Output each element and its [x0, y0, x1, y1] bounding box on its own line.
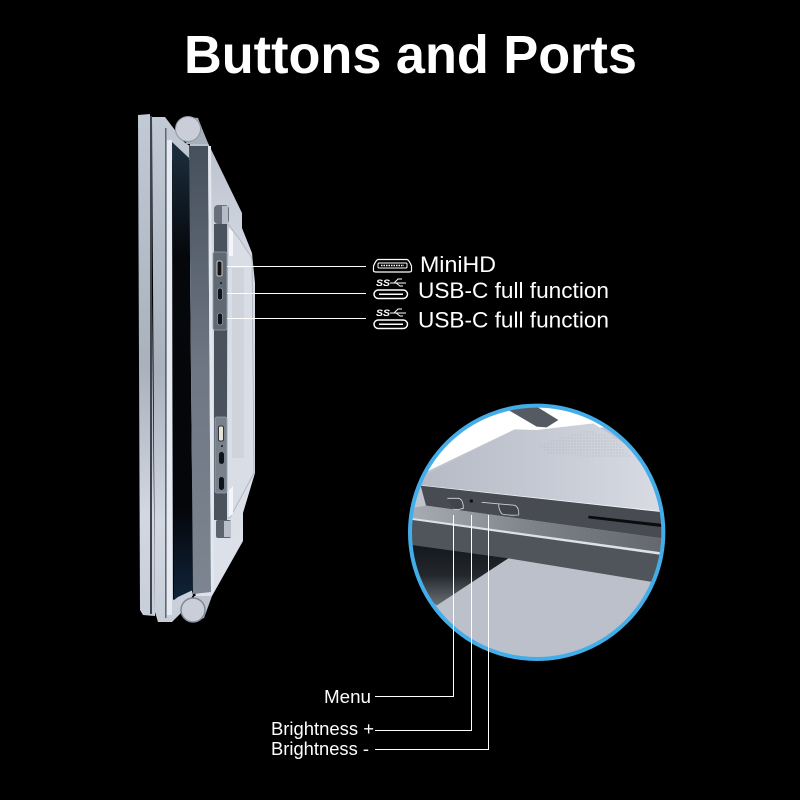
icon: USB-C SuperSpeed 2: [374, 308, 408, 328]
icon: USB-C SuperSpeed 1: SS: [376, 278, 390, 288]
label: MiniHD: MiniHD: [420, 252, 496, 277]
lower indicator dot: [221, 445, 223, 447]
top knob: [214, 205, 229, 224]
monitor side view: [138, 114, 255, 622]
band highlight: [410, 518, 667, 556]
grey back strip: [189, 146, 211, 594]
rear stand panel: [190, 124, 255, 612]
lower port: USB-C: [219, 452, 224, 464]
white highlight top: [229, 228, 233, 256]
button: menu: [447, 498, 463, 510]
lower silver band: [410, 506, 667, 555]
lower port plate: [215, 417, 227, 493]
port: MiniHD: [217, 261, 222, 276]
top panel surface: [420, 423, 667, 512]
port callout lines: [227, 266, 366, 318]
back plate perforation: [232, 268, 244, 458]
bottom panel: [436, 558, 651, 606]
frame highlights: [150, 116, 172, 618]
button callout: brightness plus line: [375, 515, 472, 730]
icon: USB-C SuperSpeed 1: [374, 278, 408, 298]
label: USB-C 1: USB-C full function: [418, 278, 609, 303]
indicator dot: [220, 282, 222, 284]
lower port: USB-C second: [219, 477, 224, 490]
label: Menu: Menu: [324, 687, 371, 707]
button callout: menu line: [375, 515, 454, 696]
button edge strip: [421, 486, 667, 539]
raised back plate: [226, 224, 254, 518]
port: USB-C second: [218, 313, 222, 325]
front frame inner: [152, 117, 193, 622]
magnified button detail circle: [407, 402, 667, 668]
lower port: MiniHD: [218, 426, 224, 441]
dark gap: [407, 544, 508, 606]
slot: [588, 516, 662, 527]
front frame outer: [138, 114, 155, 616]
dark frame band: [410, 520, 667, 585]
bottom knob: [216, 520, 231, 538]
button callout: brightness minus line: [375, 515, 488, 750]
white highlight bottom: [229, 486, 233, 517]
perforation dots: [539, 432, 630, 456]
label: Brightness +: Brightness +: [271, 719, 374, 739]
upper port plate: [213, 252, 227, 330]
label: USB-C 2: USB-C full function: [418, 308, 609, 332]
white background: [428, 408, 604, 471]
icon: MiniHD port: [374, 260, 412, 272]
lens contents: [412, 408, 662, 657]
dark screen gap: [172, 142, 193, 600]
title: Buttons and Ports: [184, 25, 637, 85]
icon: USB-C SuperSpeed 2: SS: [376, 308, 390, 318]
bright strip edge: [208, 146, 214, 592]
port: USB-C: [218, 288, 222, 300]
stand arm: [508, 407, 558, 427]
lens backdrop: [413, 427, 662, 606]
reset pinhole: [470, 499, 473, 503]
panel highlight: [420, 485, 667, 513]
button: brightness rocker: [482, 502, 519, 515]
port bar: [214, 224, 227, 520]
bottom hinge: [181, 596, 212, 622]
label: Brightness -: Brightness -: [271, 739, 369, 759]
top hinge: [176, 116, 208, 144]
lens blue ring: [410, 406, 663, 659]
